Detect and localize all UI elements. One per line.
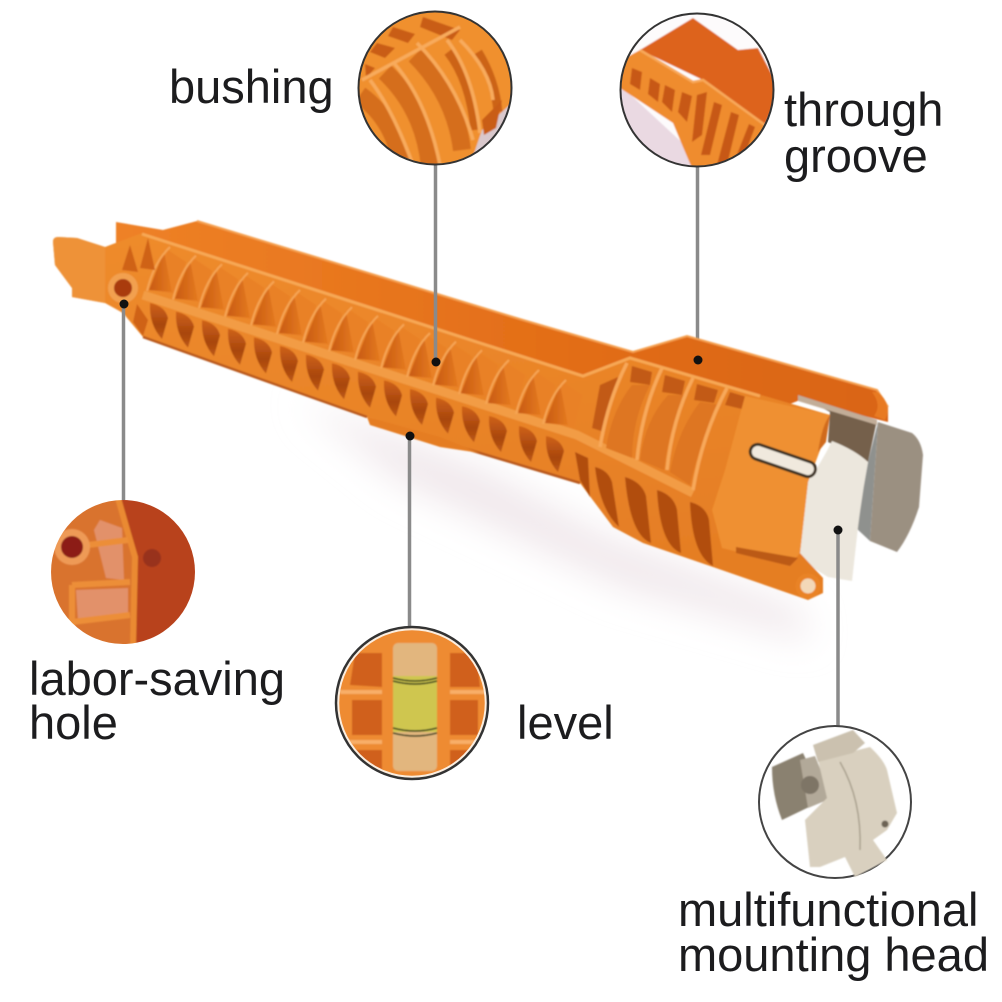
callout circle: through groove	[620, 12, 774, 168]
marker dots	[120, 300, 842, 534]
left tip	[53, 237, 105, 303]
back wall	[116, 221, 888, 440]
lower slot	[736, 547, 798, 566]
callout circle: labor-saving hole	[50, 498, 200, 648]
mid rail	[143, 295, 693, 493]
leader line: bushing	[434, 165, 437, 362]
leader line: labor-saving hole	[122, 304, 125, 500]
label: labor-saving hole	[29, 652, 285, 749]
plate top edge	[798, 395, 877, 425]
level mount	[367, 417, 480, 453]
callout circle: level	[335, 625, 490, 780]
head smooth sleeve	[712, 396, 830, 565]
label: multifunctional mounting head: multifunctional	[678, 883, 978, 936]
callout circle: mounting head	[759, 726, 911, 878]
label: through groove: groove	[784, 129, 928, 182]
head rear pocket	[592, 377, 618, 432]
front body	[53, 233, 830, 600]
tool shadow	[300, 400, 810, 640]
top rim	[142, 234, 760, 396]
label: labor-saving hole: hole	[29, 696, 118, 749]
far end roll	[872, 392, 888, 420]
label: through groove	[784, 83, 943, 182]
lower roll end	[798, 576, 818, 596]
label: multifunctional mounting head: mounting head	[678, 928, 989, 981]
grey blade	[870, 422, 923, 552]
head lower pockets	[575, 452, 713, 566]
end hole ring	[108, 273, 138, 303]
head curved recesses	[606, 385, 720, 485]
grey blade side	[856, 422, 878, 541]
label: labor-saving hole: labor-saving	[29, 652, 285, 705]
label: level: level	[517, 696, 614, 749]
label: through groove: through	[784, 83, 943, 136]
white cap	[797, 441, 868, 581]
leader line: level	[408, 436, 411, 628]
tool illustration	[53, 221, 923, 600]
head highlights	[600, 363, 727, 490]
head small pockets	[630, 366, 750, 410]
callout circle: bushing	[355, 8, 515, 168]
label: bushing: bushing	[169, 60, 334, 113]
brown head plate	[798, 395, 877, 462]
leader line: through groove	[696, 165, 699, 360]
leader line: mounting head	[836, 530, 840, 727]
label: multifunctional mounting head	[678, 883, 989, 981]
first partial pockets	[122, 238, 155, 336]
end hole	[818, 415, 830, 452]
back wall rim	[197, 221, 888, 407]
end hole	[114, 279, 132, 297]
rib pockets	[147, 247, 582, 472]
lower edge shade	[143, 337, 580, 483]
pin slot	[748, 442, 817, 479]
